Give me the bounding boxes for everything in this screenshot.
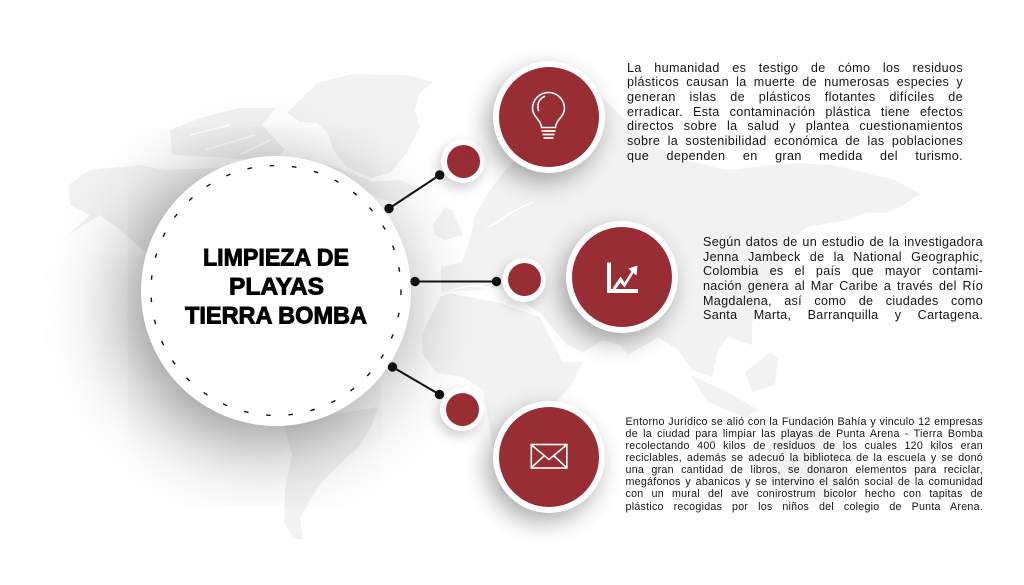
small node: bottom bbox=[440, 387, 484, 431]
icon circle: growth chart bbox=[566, 220, 678, 332]
text block: plastics impact: sobre la sostenibilidad económica de las poblaciones bbox=[627, 134, 963, 148]
text block: cleanup actions: con un mural del ave conirostrum bicolor hecho con tapitas de bbox=[626, 488, 983, 500]
title: PLAYAS bbox=[229, 274, 324, 300]
text block: plastics impact: generan islas de plásticos flotantes difíciles de bbox=[627, 90, 963, 104]
text block: plastics impact: erradicar. Esta contaminación plástica tiene efectos bbox=[627, 105, 963, 119]
text block: cleanup actions: una gran cantidad de libros, se donaron elementos para reciclar, bbox=[626, 464, 983, 476]
text block: Colombia data: Magdalena, así como de ciudades como bbox=[703, 294, 983, 308]
text block: plastics impact: directos sobre la salud y plantea cuestionamientos bbox=[627, 119, 963, 133]
connector: middle bbox=[411, 278, 500, 285]
connector: bottom bbox=[389, 363, 443, 398]
icon: light bulb bbox=[532, 92, 566, 139]
title bbox=[185, 244, 367, 330]
text block: Colombia data: Jenna Jambeck de la National Geographic, bbox=[703, 250, 983, 264]
text block: plastics impact: La humanidad es testigo de cómo los residuos bbox=[627, 60, 963, 74]
text block: cleanup actions: reciclables, además se adecuó la biblioteca de la escuela y se donó bbox=[626, 452, 983, 464]
text block: Colombia data: nación genera al Mar Caribe a través del Río bbox=[703, 279, 983, 293]
text block: cleanup actions: recolectando 400 kilos de residuos de los cuales 120 kilos eran bbox=[626, 440, 983, 452]
small node: middle bbox=[502, 258, 546, 302]
title: LIMPIEZA DE bbox=[203, 244, 349, 272]
small node: top bbox=[441, 139, 485, 183]
dashed ring bbox=[151, 166, 401, 416]
text block: cleanup actions: Entorno Jurídico se alió con la Fundación Bahía y vinculo 12 empresas bbox=[626, 416, 983, 428]
text block: cleanup actions bbox=[626, 416, 983, 513]
text block: Colombia data bbox=[703, 235, 983, 322]
text block: plastics impact: plásticos causan la muerte de numerosas especies y bbox=[627, 75, 963, 89]
icon circle: envelope bbox=[492, 400, 604, 512]
connector: top bbox=[385, 171, 443, 212]
text block: plastics impact: que dependen en gran medida del turismo. bbox=[627, 149, 963, 163]
text block: Colombia data: Santa Marta, Barranquilla y Cartagena. bbox=[703, 308, 983, 322]
central circle bbox=[141, 156, 411, 426]
text block: Colombia data: Según datos de un estudio de la investigadora bbox=[703, 235, 983, 249]
text block: cleanup actions: megáfonos y abanicos y se intervino el salón social de la comunidad bbox=[626, 476, 983, 488]
text block: plastics impact bbox=[627, 60, 963, 163]
icon: envelope bbox=[530, 444, 568, 469]
text block: cleanup actions: de la ciudad para limpiar las playas de Punta Arena - Tierra Bomba bbox=[626, 428, 983, 440]
icon circle: light bulb bbox=[492, 60, 604, 172]
text block: cleanup actions: plástico recogidas por los niños del colegio de Punta Arena. bbox=[626, 501, 983, 513]
text block: Colombia data: Colombia es el país que mayor contami- bbox=[703, 264, 983, 278]
icon: growth chart bbox=[607, 262, 638, 293]
title: TIERRA BOMBA bbox=[185, 303, 367, 330]
